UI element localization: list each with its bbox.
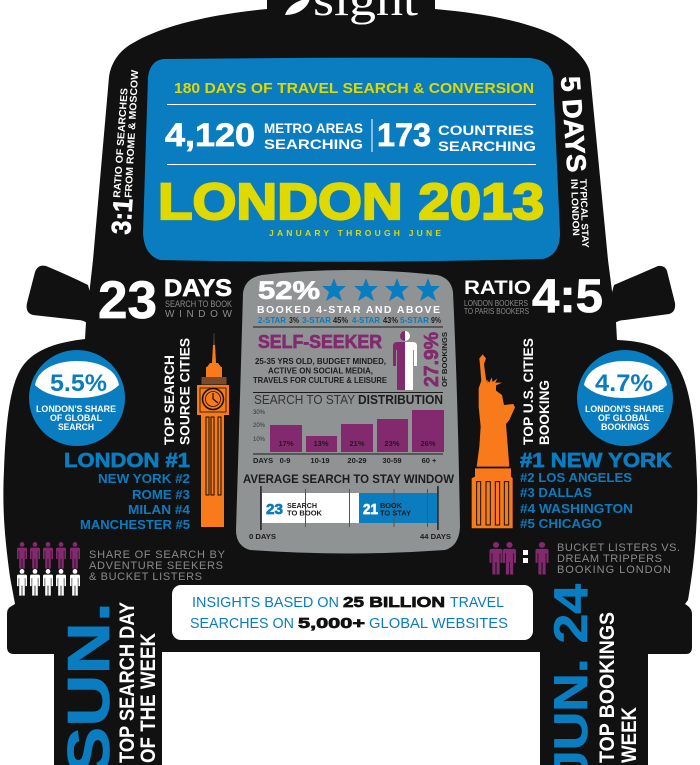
timeline bar: search to stay window: 23 [266, 501, 283, 518]
self-seeker heading: SELF-SEEKER [258, 332, 382, 352]
badge: global search share: SEARCH [58, 422, 94, 432]
stat: ratio 4:5: TO PARIS BOOKERS [464, 307, 529, 316]
stat: countries: 173 [377, 117, 431, 153]
bar chart: search to stay distribution: 0-9 [280, 456, 290, 465]
list: top search cities: MILAN #4 [128, 502, 191, 517]
icon row: bucket listers vs dream trippers [490, 542, 548, 574]
timeline bar: search to stay window: TO BOOK [287, 508, 323, 518]
callout: 25 billion searches: 25 BILLION [343, 594, 445, 611]
right pillar: top bookings week [544, 584, 641, 765]
27.9 percent of bookings: OF BOOKINGS [440, 332, 449, 387]
stat: countries [377, 117, 536, 154]
stat: 23 days: DAYS [164, 275, 232, 302]
heading: top search source cities: TOP SEARCH [161, 355, 177, 445]
timeline bar: search to stay window: 44 DAYS [420, 532, 451, 541]
list: top search cities: ROME #3 [132, 487, 190, 502]
badge: global bookings share: OF GLOBAL [598, 413, 650, 423]
stat: metro areas: METRO AREAS [264, 120, 363, 136]
bar chart: search to stay distribution: 21% [349, 439, 365, 448]
star rating breakdown: 5-STAR [400, 315, 429, 325]
stat: 23 days: WINDOW [165, 309, 233, 320]
heading: top US cities: TOP U.S. CITIES [520, 338, 536, 445]
timeline bar: search to stay window: BOOK [380, 501, 403, 510]
booked label: BOOKED 4-STAR AND ABOVE [257, 304, 440, 316]
bar chart: search to stay distribution: 30% [253, 410, 266, 416]
subtitle: 180 days: 180 DAYS OF TRAVEL SEARCH & CONVERSION [174, 80, 534, 97]
callout: 25 billion searches: SEARCHES ON [190, 615, 294, 632]
bar chart: search to stay distribution [253, 410, 444, 465]
bar chart: search to stay distribution: 20-29 [347, 456, 367, 465]
timeline bar: search to stay window: TO STAY [380, 508, 411, 518]
timeline bar: search to stay window [249, 486, 451, 541]
side stat: 3:1 ratio: 3:1 [106, 197, 138, 235]
list: top US cities: #4 WASHINGTON [520, 501, 633, 516]
badge: global search share: LONDON'S SHARE [36, 404, 116, 414]
heading: average window: AVERAGE SEARCH TO STAY WINDOW [243, 474, 454, 486]
left pillar: top search day: OF THE WEEK [137, 633, 160, 763]
caption: bucket listers: BOOKING LONDON [557, 564, 671, 576]
stat: ratio 4:5: RATIO [464, 278, 531, 299]
left wing mirror [27, 266, 92, 324]
badge: global search share [29, 350, 125, 446]
caption: bucket listers: BUCKET LISTERS VS. [557, 542, 680, 554]
star rating breakdown: 4-STAR [352, 315, 380, 325]
callout: 25 billion searches: INSIGHTS BASED ON [192, 594, 339, 611]
callout: 25 billion searches: TRAVEL [450, 594, 504, 611]
list: top US cities [520, 450, 673, 531]
caption: share of search: SHARE OF SEARCH BY [89, 549, 226, 561]
badge: global bookings share: 4.7% [595, 370, 653, 397]
stat: countries: SEARCHING [438, 138, 536, 154]
right pillar: top bookings week: TOP BOOKINGS [596, 612, 619, 763]
icon: Big Ben [197, 333, 229, 527]
bar chart: search to stay distribution: DAYS [253, 456, 273, 465]
list: top search cities: NEW YORK #2 [98, 471, 190, 486]
badge: global bookings share: LONDON'S SHARE [585, 404, 664, 414]
list: top US cities: #5 CHICAGO [520, 516, 602, 531]
stat: ratio 4:5: LONDON BOOKERS [464, 299, 528, 308]
heading: top US cities [520, 338, 552, 445]
callout: 25 billion searches [172, 585, 533, 640]
bar chart: search to stay distribution: 20% [253, 423, 266, 429]
bar chart: search to stay distribution: 13% [313, 439, 329, 448]
caption: share of search: & BUCKET LISTERS [89, 571, 202, 583]
caption: share of search: ADVENTURE SEEKERS [89, 560, 223, 572]
heading: distribution: SEARCH TO STAY [254, 392, 355, 407]
side stat: 5 days: 5 DAYS [555, 75, 592, 173]
icon: four stars [322, 278, 440, 301]
callout: 25 billion searches: GLOBAL WEBSITES [369, 615, 508, 632]
stat: 23 days: 23 [98, 271, 157, 330]
star rating breakdown: 3% [289, 315, 299, 325]
caption: bucket listers: DREAM TRIPPERS [557, 553, 662, 565]
list: top search cities: LONDON #1 [64, 450, 190, 472]
stat: ratio 4:5: 4:5 [532, 269, 603, 322]
timeline bar: search to stay window: 0 DAYS [249, 532, 276, 541]
panel: grey dashboard [236, 270, 460, 554]
bar chart: search to stay distribution: 26% [420, 439, 436, 448]
stat: metro areas: 4,120 [165, 117, 255, 153]
27.9 percent of bookings: 27.9% [421, 332, 443, 387]
title: London 2013: LONDON 2013 [158, 173, 544, 230]
bar chart: search to stay distribution: 17% [278, 439, 294, 448]
heading: top search source cities: SOURCE CITIES [176, 338, 192, 445]
badge: global search share: OF GLOBAL [50, 413, 102, 423]
stat: ratio 4:5 [464, 269, 603, 322]
right pillar: top bookings week: WEEK [618, 707, 641, 763]
self-seeker description: 25-35 YRS OLD, BUDGET MINDED, [255, 356, 386, 366]
list: top search cities: MANCHESTER #5 [80, 517, 190, 532]
left pillar: top search day: TOP SEARCH DAY [116, 602, 139, 763]
self-seeker description [253, 356, 387, 385]
side stat: 5 days: TYPICAL STAY [577, 179, 590, 249]
badge: global bookings share: BOOKINGS [601, 422, 649, 432]
logo [285, 0, 418, 25]
heading: distribution: DISTRIBUTION [358, 393, 443, 407]
heading: top search source cities [161, 338, 192, 445]
caption: share of search [89, 549, 226, 583]
timeline bar: search to stay window: 21 [363, 501, 378, 518]
icon: half-filled person [393, 331, 417, 390]
side stat: 3:1 ratio: RATIO OF SEARCHES [112, 87, 131, 198]
list: top US cities: #1 NEW YORK [520, 450, 673, 472]
bar chart: search to stay distribution: 60 + [422, 456, 437, 465]
badge: global bookings share [577, 350, 673, 446]
icon: Statue of Liberty [472, 354, 515, 528]
star rating breakdown: 45% [333, 315, 348, 325]
self-seeker description: ACTIVE ON SOCIAL MEDIA, [268, 366, 373, 376]
heading: distribution [254, 392, 443, 407]
stat: 23 days: SEARCH TO BOOK [165, 299, 233, 310]
stat: metro areas [165, 117, 363, 153]
right wing mirror [610, 266, 675, 324]
icon row: adventure seekers and bucket listers [17, 542, 80, 596]
list: top US cities: #2 LOS ANGELES [520, 470, 632, 485]
bar chart: search to stay distribution: 10% [253, 437, 266, 443]
stat: metro areas: SEARCHING [264, 136, 363, 152]
star rating breakdown: 2-STAR [258, 315, 286, 325]
star rating breakdown: 3-STAR [302, 315, 331, 325]
star rating breakdown [258, 315, 441, 325]
windscreen panel: headline [143, 58, 560, 262]
list: top US cities: #3 DALLAS [520, 485, 592, 500]
bar chart: search to stay distribution: 10-19 [310, 456, 330, 465]
52 percent heading: 52% [258, 277, 320, 305]
badge: global search share: 5.5% [50, 370, 107, 397]
list: top search cities [64, 450, 191, 532]
stat: countries: COUNTRIES [438, 122, 534, 138]
stat: 23 days [98, 271, 233, 330]
bar chart: search to stay distribution: 23% [384, 439, 400, 448]
side stat: 5 days [555, 75, 592, 249]
bar chart: search to stay distribution: 30-59 [382, 456, 402, 465]
left pillar: top search day [56, 602, 160, 765]
side stat: 3:1 ratio [106, 69, 141, 235]
side stat: 5 days: IN LONDON [568, 179, 581, 236]
self-seeker description: TRAVELS FOR CULTURE & LEISURE [253, 375, 387, 385]
date range: JANUARY THROUGH JUNE [269, 228, 441, 238]
caption: bucket listers [557, 542, 680, 576]
star rating breakdown: 9% [431, 315, 441, 325]
side stat: 3:1 ratio: FROM ROME & MOSCOW [124, 69, 141, 198]
star rating breakdown: 43% [383, 315, 398, 325]
timeline bar: search to stay window: SEARCH [287, 501, 317, 510]
callout: 25 billion searches: 5,000+ [298, 615, 365, 632]
heading: top US cities: BOOKING [536, 380, 552, 445]
